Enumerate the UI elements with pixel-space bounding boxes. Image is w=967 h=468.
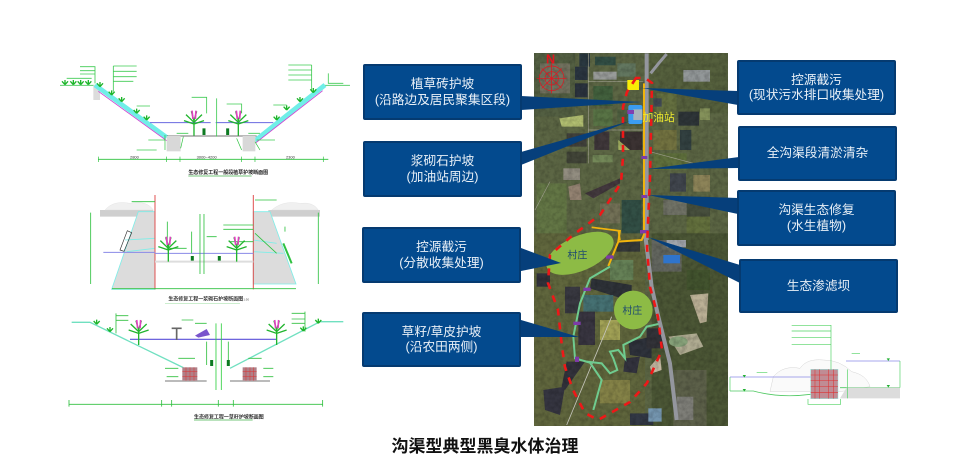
drawing: masonry slope cross-section [91, 195, 320, 303]
pointer: source control outfall [642, 88, 738, 105]
callout: source control scattered [362, 227, 521, 283]
drawing: grass seed slope cross-section: 1:30 [254, 415, 260, 419]
icon: compass [537, 52, 567, 93]
drawing: grass brick slope cross-section: 1:30 [254, 171, 260, 175]
map fields: lower area [530, 233, 742, 427]
pointer: filter dam [648, 237, 740, 283]
callout: source control scattered: (分散收集处理) [399, 256, 484, 270]
marker: yellow outfall [627, 80, 639, 90]
callout: grass seed slope: (沿农田两侧) [406, 340, 477, 354]
callout: grass brick slope: (沿路边及居民聚集区段) [375, 92, 510, 106]
label: village green area small [614, 291, 653, 329]
callout: filter dam: 生态渗滤坝 [787, 279, 850, 293]
callout: ecological restoration: 沟渠生态修复 [778, 203, 855, 217]
label: village green area small: 村庄 [622, 304, 642, 317]
aerial map [530, 50, 742, 427]
map roads and annotations: upper [537, 52, 675, 240]
drawing: grass brick slope cross-section: 2300 [286, 155, 296, 160]
callout: source control outfall [737, 60, 896, 115]
drawing: masonry slope cross-section: 生态修复工程一浆砌石护坡断面图 [168, 296, 243, 303]
callout: ecological restoration: (水生植物) [787, 218, 846, 232]
callout: ecological restoration [737, 190, 896, 246]
icon: compass: N [546, 52, 555, 66]
title: 沟渠型典型黑臭水体治理 [392, 437, 578, 456]
callout: source control outfall: (现状污水排口收集处理) [749, 88, 884, 102]
drawing: grass brick slope cross-section: 2800 [130, 155, 140, 160]
callout: grass brick slope: 植草砖护坡 [411, 77, 474, 91]
pointer: grass seed slope [521, 320, 579, 337]
label: village green area large [546, 232, 614, 275]
pointer: masonry slope [521, 121, 630, 165]
drawing: grass brick slope cross-section: 3000~4200 [197, 155, 217, 160]
callout: grass seed slope: 草籽/草皮护坡 [402, 324, 481, 338]
label: gas station: 加油站 [643, 111, 675, 124]
callout: filter dam [739, 259, 898, 313]
callout: source control outfall: 控源截污 [791, 72, 842, 86]
drawing: grass seed slope cross-section: 生态修复工程一草籽护坡断面图 [194, 413, 264, 420]
drawing: masonry slope cross-section: 1:50 [243, 298, 249, 302]
pointer: ecological restoration [648, 195, 738, 214]
callout: grass brick slope [363, 64, 522, 120]
drawing: grass brick slope cross-section [60, 65, 350, 176]
icon: gas station marker [627, 105, 642, 124]
callout: masonry slope [363, 141, 522, 197]
pointer: dredging [648, 157, 739, 169]
map texture [534, 53, 728, 426]
callout: grass seed slope [362, 312, 521, 367]
callout: source control scattered: 控源截污 [416, 240, 467, 254]
map roads and annotations: lower [540, 223, 680, 425]
callout: dredging: 全沟渠段清淤清杂 [767, 146, 868, 160]
callout: masonry slope: (加油站周边) [407, 170, 478, 184]
purple gates upper [640, 156, 649, 233]
drawing: grass seed slope cross-section [69, 312, 343, 420]
callout: masonry slope: 浆砌石护坡 [411, 154, 474, 168]
map fields: upper area [534, 53, 710, 234]
pointer: grass brick slope [521, 96, 642, 110]
pointer: source control scattered [521, 248, 561, 271]
label: village green area large: 村庄 [567, 249, 587, 262]
drawing: ecological filter dam [730, 325, 900, 404]
drawing: grass brick slope cross-section: 生态修复工程一般段植草护坡断面图 [188, 169, 268, 176]
callout: dredging [738, 126, 897, 181]
project boundary dashed [548, 78, 662, 420]
